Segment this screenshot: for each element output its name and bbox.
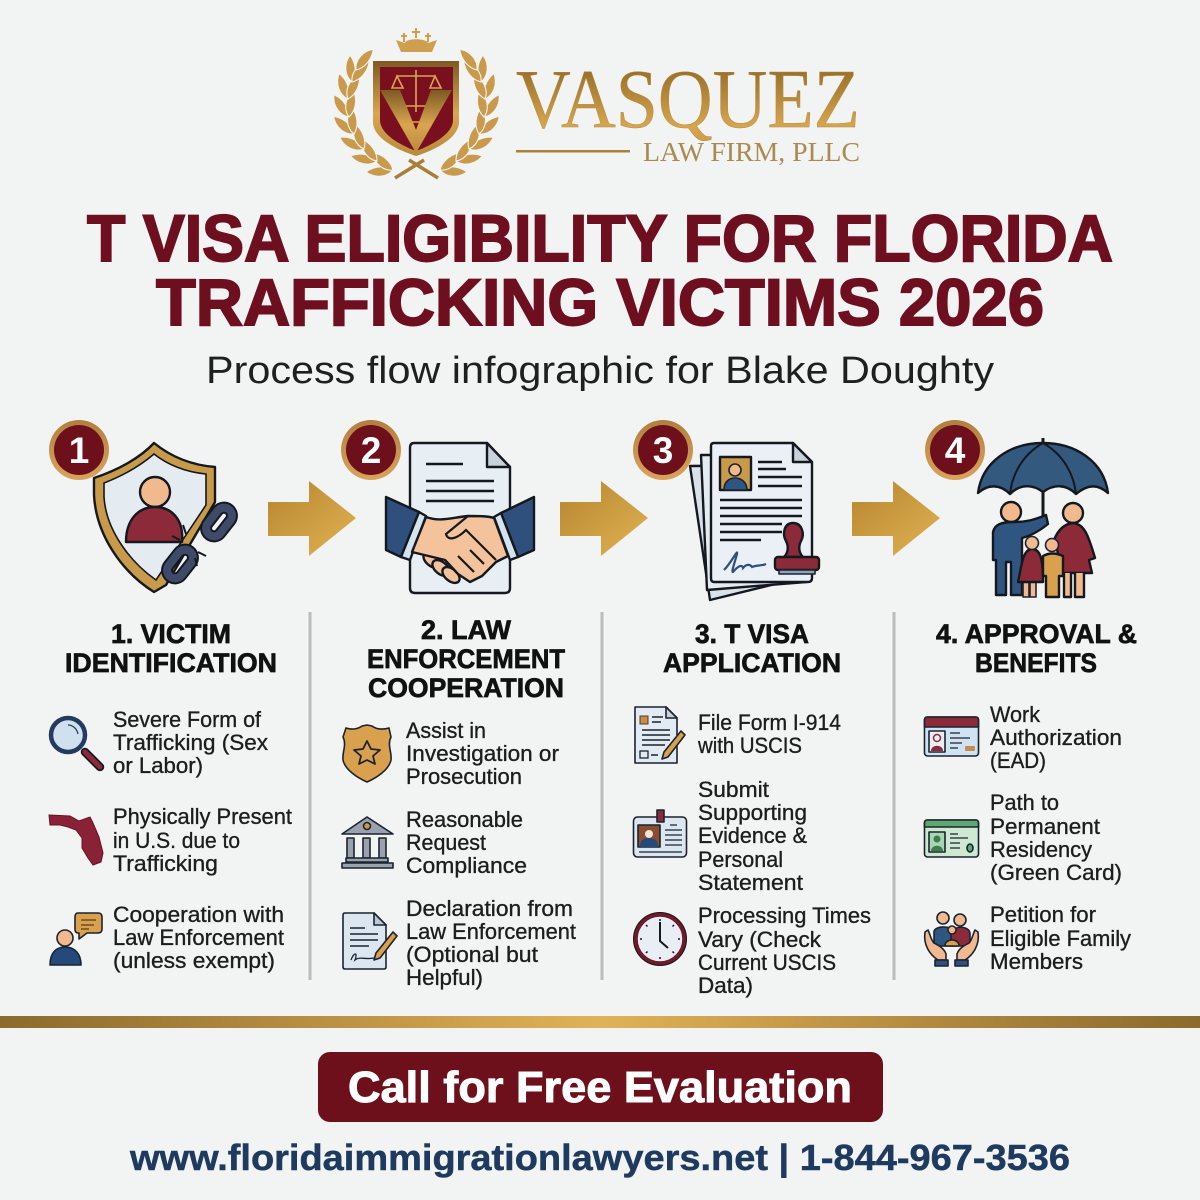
heading: t visa application [663,619,841,678]
icon: laurel wreath [330,46,503,178]
item text: assist: Prosecution [406,764,522,789]
item text: file form: with USCIS [697,733,802,758]
heading: victim identification [65,619,277,678]
badge: 4 [925,420,985,480]
heading: t visa application: 3. T VISA [695,619,809,649]
item text: assist: Assist in [406,718,486,743]
item text: work authorization: (EAD) [990,748,1046,773]
panel: step 1 victim identification [49,420,293,973]
gold divider band [0,1016,1200,1028]
icon: family under umbrella [978,438,1108,597]
badge: 1 [49,420,109,480]
heading: victim identification: IDENTIFICATION [65,648,277,678]
arrow: step 2 to step 3 [560,481,648,556]
item text: processing times [698,903,871,998]
heading: victim identification: 1. VICTIM [111,619,231,649]
badge: 1: 1 [69,430,89,471]
item text: submit evidence [698,777,807,895]
icon: shield with V [373,61,459,156]
icon: green card [924,820,978,857]
icon: work authorization card [924,717,978,756]
icon: crown [396,28,437,52]
badge: 4: 4 [945,430,966,471]
item text: file form: File Form I-914 [698,710,841,735]
arrow: step 1 to step 2 [268,481,356,556]
item text: physically present: Trafficking [113,851,218,876]
item text: cooperation: Cooperation with [113,902,284,927]
icon: courthouse [342,817,393,868]
heading: t visa application: APPLICATION [663,648,841,678]
item text: cooperation: Law Enforcement [113,925,285,950]
item text: submit evidence: Supporting [698,800,807,825]
item text: declaration: Declaration from [406,896,573,921]
badge: 3: 3 [653,430,673,471]
item text: reasonable request [406,807,527,878]
logo: Vasquez Law Firm [330,28,860,178]
item text: physically present: Physically Present [113,804,293,829]
icon: id badge [634,810,686,857]
item text: cooperation [113,902,285,973]
badge: 2 [341,420,401,480]
badge: 3 [633,420,693,480]
title [87,201,1113,339]
item text: declaration: Helpful) [406,965,483,990]
item text: path to permanent residency [990,790,1122,885]
item text: physically present [113,804,293,876]
item text: reasonable request: Reasonable [406,807,523,832]
heading: law enforcement cooperation: ENFORCEMENT [367,644,565,674]
item text: work authorization: Work [990,702,1041,727]
item text: submit evidence: Personal [698,847,783,872]
logo wordmark: VASQUEZ [516,53,860,146]
item text: work authorization: Authorization [990,725,1122,750]
item text: reasonable request: Compliance [406,853,527,878]
item text: processing times: Vary (Check [698,927,822,952]
item text: petition for family [990,902,1132,974]
item text: assist [406,718,560,789]
heading: law enforcement cooperation: COOPERATION [368,673,564,703]
title: T VISA ELIGIBILITY FOR FLORIDA [87,201,1113,275]
icon: family in hands [925,912,978,966]
call to action button: Call for Free Evaluation [348,1063,852,1112]
item text: path to permanent residency: Residency [990,837,1093,862]
item text: severe form [113,707,269,778]
heading: law enforcement cooperation [367,615,565,703]
item text: submit evidence: Submit [698,777,770,802]
item text: work authorization [990,702,1122,773]
icon: florida map [49,815,103,865]
icon: document with handshake [386,443,534,593]
item text: submit evidence: Statement [698,870,804,895]
item text: reasonable request: Request [406,830,487,855]
icon: signed document with pen [343,913,397,969]
item text: severe form: or Labor) [113,753,203,778]
item text: petition for family: Petition for [990,902,1096,927]
icon: magnifying glass [51,718,100,767]
icon: person speaking [50,913,102,965]
item text: declaration: Law Enforcement [406,919,577,944]
item text: processing times: Data) [698,973,753,998]
heading: approval and benefits [936,619,1137,678]
heading: approval and benefits: BENEFITS [975,648,1097,678]
item text: petition for family: Eligible Family [990,926,1132,951]
item text: declaration [406,896,577,990]
panel: step 2 law enforcement cooperation [341,420,577,990]
item text: processing times: Current USCIS [698,950,836,975]
heading: law enforcement cooperation: 2. LAW [421,615,512,645]
arrow: step 3 to step 4 [852,481,940,556]
item text: severe form: Severe Form of [113,707,262,732]
contact line: www.floridaimmigrationlawyers.net | 1-844-967-3536 [129,1137,1070,1179]
panel: step 3 t visa application [633,420,871,998]
badge: 2: 2 [361,430,381,471]
heading: approval and benefits: 4. APPROVAL & [936,619,1137,649]
icon: stacked documents with stamp [690,443,819,600]
item text: declaration: (Optional but [406,942,539,967]
item text: path to permanent residency: (Green Card) [990,860,1122,885]
subtitle: Process flow infographic for Blake Doughty [206,350,994,392]
icon: clock [634,912,686,966]
call to action button [318,1052,883,1122]
icon: police badge [343,725,391,782]
icon: form with pen [635,707,685,763]
item text: path to permanent residency: Path to [990,790,1059,815]
item text: submit evidence: Evidence & [698,823,807,848]
item text: assist: Investigation or [406,741,560,766]
item text: physically present: in U.S. due to [113,828,240,853]
item text: severe form: Trafficking (Sex [113,730,269,755]
item text: file form [697,710,841,758]
item text: path to permanent residency: Permanent [990,814,1101,839]
icon: shield with person and broken chain [94,443,235,592]
item text: cooperation: (unless exempt) [113,948,275,973]
item text: processing times: Processing Times [698,903,871,928]
item text: petition for family: Members [990,949,1083,974]
title: TRAFFICKING VICTIMS 2026 [156,265,1044,339]
panel: step 4 approval and benefits [924,420,1137,974]
logo subline: LAW FIRM, PLLC [643,137,860,167]
